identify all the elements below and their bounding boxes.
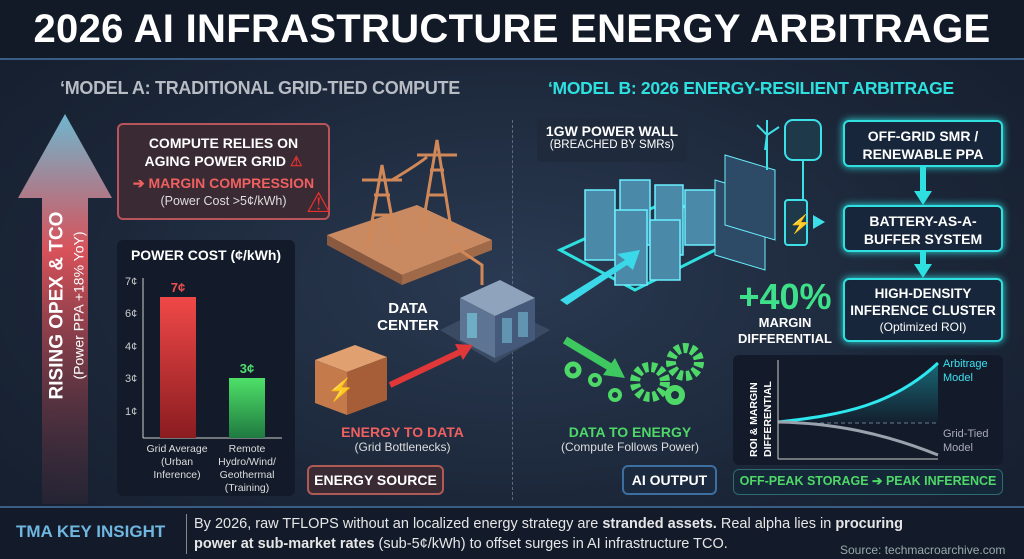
stat: +40%: DIFFERENTIAL: [738, 331, 832, 346]
insight text: By 2026, raw TFLOPS without an localized energy strategy are stranded assets. Real alpha lies in procuring: [194, 516, 903, 532]
title bar: 2026 AI INFRASTRUCTURE ENERGY ARBITRAGE: [33, 7, 990, 51]
chart: power cost: Inference): [153, 469, 201, 481]
line chart: ROI & MARGIN: [748, 382, 760, 457]
text: data to energy: [561, 424, 699, 454]
chart: power cost: Grid Average: [146, 443, 208, 455]
label: power wall: (BREACHED BY SMRs): [550, 139, 674, 151]
flow box 3: INFERENCE CLUSTER: [850, 303, 996, 318]
chart: power cost: (Training): [225, 482, 269, 494]
heading: model B: ‘MODEL B: 2026 ENERGY-RESILIENT ARBITRAGE: [548, 78, 954, 98]
flow box 2: [843, 205, 1003, 252]
chart: power cost: 3¢: [240, 361, 254, 376]
text: energy to data: (Grid Bottlenecks): [354, 440, 451, 454]
pill: energy source: [307, 465, 444, 495]
chart: power cost: [117, 240, 295, 496]
label: power wall: [537, 118, 687, 162]
line chart: Model: [943, 372, 973, 384]
chart: power cost: Hydro/Wind/: [218, 456, 276, 468]
stat: +40%: [738, 276, 832, 346]
bottom insight bar: [0, 506, 1024, 559]
icon: server cluster: [556, 154, 776, 305]
callout: aging grid: [117, 123, 330, 220]
chart: power cost: 1¢: [125, 406, 137, 418]
stat: +40%: MARGIN: [759, 315, 811, 330]
text: energy to data: ENERGY TO DATA: [341, 424, 464, 440]
arrow down 1: [914, 167, 932, 205]
arrow label: [46, 212, 86, 399]
flow box 3: HIGH-DENSITY: [875, 286, 971, 301]
icon: warning: ⚠: [306, 187, 331, 218]
text: data to energy: (Compute Follows Power): [561, 440, 699, 454]
chart: power cost: Remote: [229, 443, 266, 455]
chart: power cost: 4¢: [125, 341, 137, 353]
chart: power cost: 3¢: [125, 373, 137, 385]
arrow down 2: [914, 252, 932, 278]
icon: gears: [563, 336, 704, 405]
label: data center: DATA: [388, 300, 428, 317]
chart: power cost: Geothermal: [220, 469, 274, 481]
chart: power cost: POWER COST (¢/kWh): [131, 247, 281, 263]
pill: ai output: AI OUTPUT: [632, 472, 707, 488]
line chart: Grid-Tied: [943, 428, 988, 440]
source: Source: techmacroarchive.com: [840, 543, 1005, 557]
text: data to energy: DATA TO ENERGY: [569, 424, 691, 440]
flow box 1: OFF-GRID SMR /: [868, 128, 978, 144]
callout: aging grid: ➔ MARGIN COMPRESSION: [133, 175, 314, 191]
flow box 2: BATTERY-AS-A-: [869, 213, 977, 229]
icon: turbine and smr: [756, 119, 825, 246]
arrow label: RISING OPEX & TCO: [46, 212, 68, 399]
insight text: [194, 516, 903, 552]
heading: model A: ‘MODEL A: TRADITIONAL GRID-TIED COMPUTE: [60, 78, 460, 98]
pill: energy source: ENERGY SOURCE: [314, 472, 437, 488]
flow box 3: [843, 278, 1003, 342]
flow box 3: (Optimized ROI): [880, 320, 966, 334]
icon: power towers: [327, 140, 492, 285]
flow box 1: [843, 120, 1003, 167]
line chart: Arbitrage: [943, 358, 988, 370]
icon: energy box: ⚡: [327, 377, 354, 403]
title bar: [0, 0, 1024, 60]
insight text: power at sub-market rates (sub-5¢/kWh) to offset surges in AI infrastructure TCO.: [194, 536, 728, 552]
arrow: red energy: [388, 344, 473, 388]
line chart: Model: [943, 442, 973, 454]
flow box 1: RENEWABLE PPA: [862, 146, 984, 162]
icon: data center: [440, 280, 550, 363]
chart: power cost: (Urban: [161, 456, 193, 468]
chart: power cost: 6¢: [125, 308, 137, 320]
icon: turbine and smr: ⚡: [789, 213, 811, 235]
label: data center: [377, 300, 439, 334]
pill: off-peak: [733, 469, 1003, 495]
callout: aging grid: COMPUTE RELIES ON: [149, 135, 298, 151]
label: power wall: 1GW POWER WALL: [546, 123, 678, 139]
line chart: DIFFERENTIAL: [762, 381, 774, 457]
callout: aging grid: (Power Cost >5¢/kWh): [160, 194, 287, 208]
flow box 2: BUFFER SYSTEM: [864, 231, 982, 247]
label: data center: CENTER: [377, 317, 439, 334]
chart: power cost: 7¢: [171, 280, 185, 295]
icon: energy box: [315, 345, 387, 415]
line chart: [733, 355, 1003, 465]
arrow label: (Power PPA +18% YoY): [70, 232, 86, 380]
divider: [512, 120, 513, 500]
callout: aging grid: AGING POWER GRID ⚠: [144, 153, 302, 169]
pill: off-peak: OFF-PEAK STORAGE ➔ PEAK INFERENCE: [740, 474, 996, 488]
insight heading: TMA KEY INSIGHT: [16, 522, 165, 541]
chart: power cost: 7¢: [125, 276, 137, 288]
pill: ai output: [622, 465, 717, 495]
arrow: rising opex: [18, 114, 112, 504]
text: energy to data: [341, 424, 464, 454]
stat: +40%: +40%: [738, 276, 832, 317]
